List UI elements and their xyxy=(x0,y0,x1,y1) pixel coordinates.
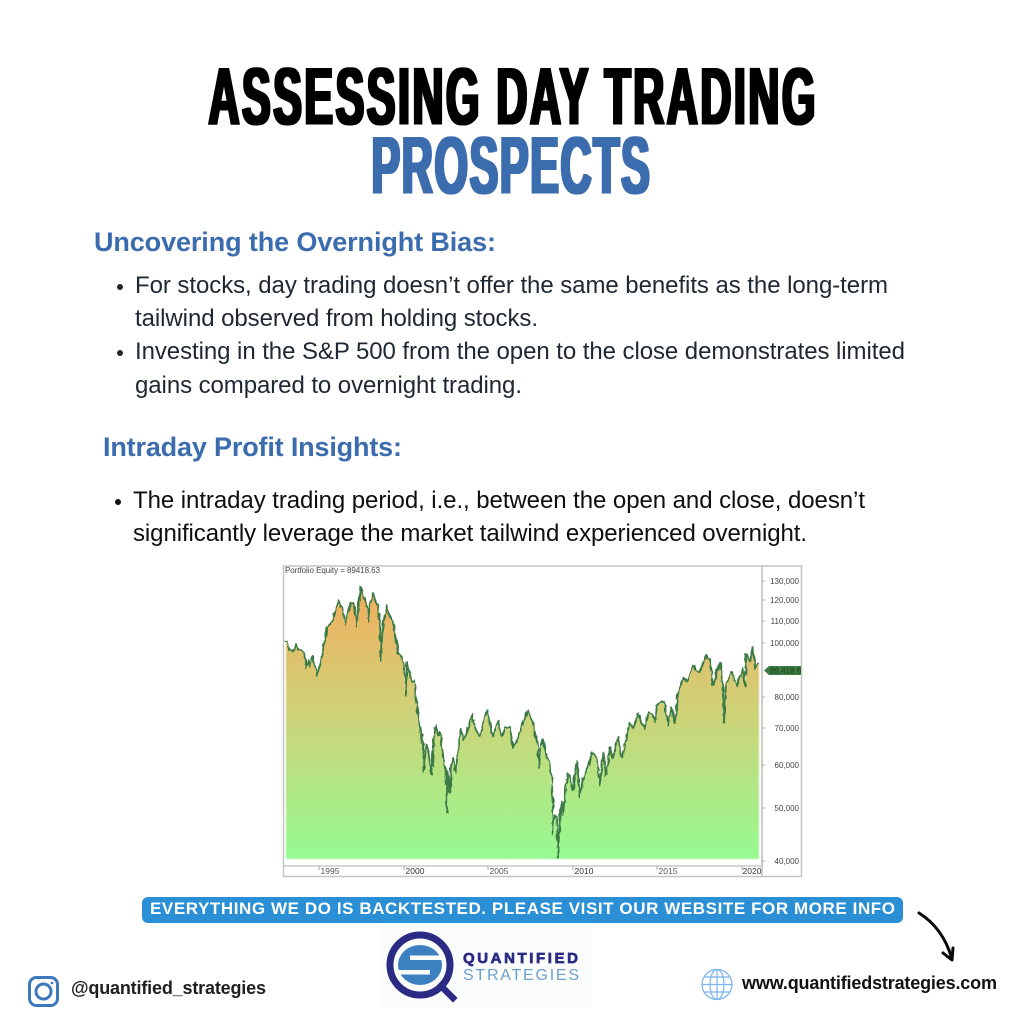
instagram icon xyxy=(30,978,58,1006)
logo: STRATEGIES xyxy=(463,967,579,984)
equity area xyxy=(286,587,759,859)
title accent word: PROSPECTS xyxy=(372,119,650,210)
title xyxy=(208,50,815,210)
x axis labels: 1995 xyxy=(321,866,340,876)
x axis labels: 2005 xyxy=(490,866,509,876)
y axis labels: 130,000 xyxy=(770,577,800,586)
y axis labels xyxy=(770,577,800,866)
bullet list: overnight bias: tailwind observed from holding stocks. xyxy=(135,305,538,332)
bullet list: intraday profit: significantly leverage the market tailwind experienced overnight. xyxy=(133,520,807,547)
y axis labels: 80,000 xyxy=(775,693,800,702)
bullet list: overnight bias: For stocks, day trading doesn’t offer the same benefits as the long-term xyxy=(135,272,888,299)
x axis labels: 2020 xyxy=(743,866,762,876)
y axis labels: 110,000 xyxy=(771,617,800,626)
x axis labels xyxy=(321,866,762,876)
y axis labels: 40,000 xyxy=(775,857,800,866)
bullet list: intraday profit: The intraday trading period, i.e., between the open and close, doesn’t xyxy=(133,487,865,514)
bullet list: overnight bias: gains compared to overnight trading. xyxy=(135,372,522,399)
x axis labels: 2000 xyxy=(406,866,425,876)
heading: overnight bias: Uncovering the Overnight Bias: xyxy=(94,227,496,257)
heading: intraday profit: Intraday Profit Insights: xyxy=(103,432,402,462)
current value tag: 89,418.6 xyxy=(770,666,802,676)
y axis labels: 50,000 xyxy=(775,804,800,813)
website banner: EVERYTHING WE DO IS BACKTESTED. PLEASE VISIT OUR WEBSITE FOR MORE INFO xyxy=(150,899,895,918)
y axis labels: 120,000 xyxy=(770,596,800,605)
equity chart xyxy=(283,566,802,876)
bullet list: overnight bias xyxy=(117,272,905,399)
title: ASSESSING DAY TRADING xyxy=(208,50,815,141)
instagram handle: @quantified_strategies xyxy=(71,978,266,998)
bullet list: intraday profit xyxy=(115,487,865,547)
chart caption: Portfolio Equity = 89418.63 xyxy=(285,566,381,575)
website url: www.quantifiedstrategies.com xyxy=(741,973,997,993)
x axis labels: 2010 xyxy=(575,866,594,876)
x axis labels: 2015 xyxy=(659,866,678,876)
logo wordmark: QUANTIFIED xyxy=(463,950,578,967)
logo xyxy=(380,925,592,1008)
arrow xyxy=(919,913,953,960)
globe icon xyxy=(702,970,732,1000)
bullet list: overnight bias: Investing in the S&P 500 from the open to the close demonstrates limited xyxy=(135,338,905,365)
y axis labels: 60,000 xyxy=(775,761,800,770)
y axis labels: 70,000 xyxy=(775,724,800,733)
logo mark xyxy=(390,935,453,998)
y axis labels: 100,000 xyxy=(770,639,800,648)
